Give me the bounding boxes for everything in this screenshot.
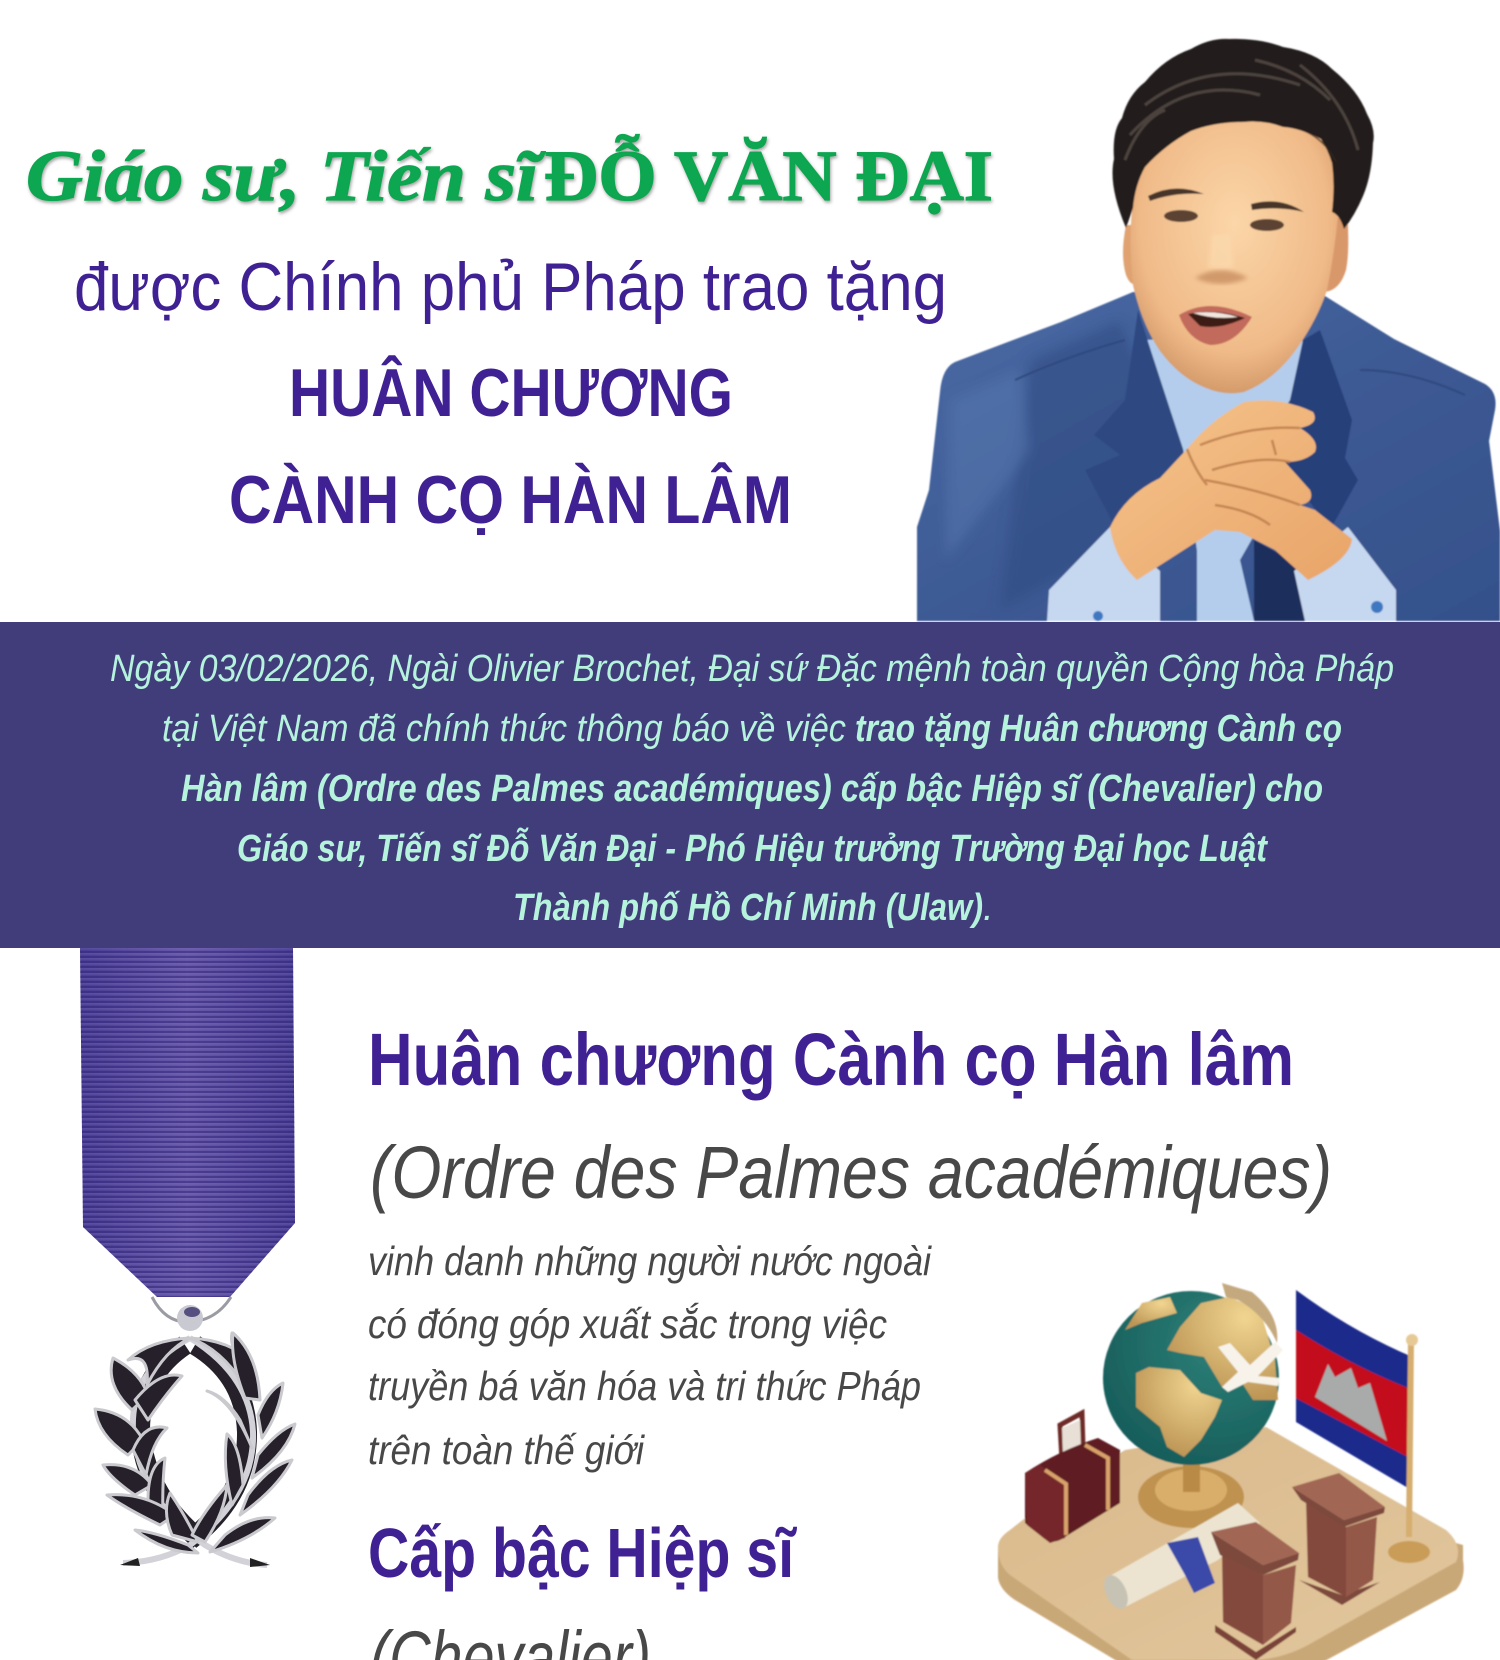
- announcement line 2: tại Việt Nam đã chính thức thông báo về việc: [162, 708, 846, 750]
- flag temple: [1315, 1364, 1387, 1441]
- announcement line 5: Thành phố Hồ Chí Minh (Ulaw): [513, 887, 983, 929]
- mouth: [1179, 306, 1252, 345]
- shirt collar: [1146, 330, 1320, 621]
- text block: description: [368, 1238, 933, 1473]
- illustration: globe, flag and podiums on wooden board: [998, 1283, 1464, 1660]
- flag: [1296, 1290, 1408, 1488]
- title: award line 1: HUÂN CHƯƠNG: [289, 354, 733, 431]
- subtitle: được Chính phủ Pháp trao tặng: [74, 249, 947, 325]
- globe: [1103, 1291, 1279, 1465]
- ribbon: [80, 948, 295, 1297]
- title: name line: ĐỖ VĂN ĐẠI: [544, 134, 993, 216]
- heading: French name: (Ordre des Palmes académiques): [370, 1131, 1332, 1214]
- tie area: [1254, 540, 1322, 621]
- airplane: [1218, 1342, 1283, 1392]
- wooden board: [998, 1480, 1464, 1660]
- jacket: [917, 292, 1500, 621]
- medal: Palmes académiques: [80, 948, 295, 1567]
- text block: description: vinh danh những người nước ngoài: [368, 1238, 933, 1284]
- ears: [1123, 225, 1140, 284]
- front podium: [1211, 1522, 1299, 1660]
- neck and face: [1130, 110, 1338, 393]
- eyebrows: [1148, 188, 1204, 201]
- announcement line 5: .: [983, 887, 994, 929]
- eyes: [1164, 210, 1198, 222]
- text block: description: có đóng góp xuất sắc trong việc: [368, 1301, 887, 1347]
- scroll: [1108, 1503, 1260, 1607]
- title block: [26, 134, 993, 538]
- nose: [1195, 270, 1248, 284]
- text block: description: truyền bá văn hóa và tri thức Pháp: [368, 1363, 921, 1409]
- suitcase: [1060, 1413, 1083, 1460]
- back podium: [1292, 1473, 1385, 1605]
- title: award line 2: CÀNH CỌ HÀN LÂM: [229, 461, 792, 538]
- announcement line 2: trao tặng Huân chương Cành cọ: [855, 708, 1342, 750]
- panel: announcement band: [0, 622, 1500, 948]
- title: name line: [26, 134, 993, 216]
- hair: [1112, 39, 1374, 229]
- flag pole: [1409, 1340, 1411, 1537]
- wreath: [95, 1333, 295, 1565]
- globe swoosh: [1222, 1283, 1277, 1343]
- announcement line 3: Hàn lâm (Ordre des Palmes académiques) cấp bậc Hiệp sĩ (Chevalier) cho: [181, 768, 1323, 810]
- globe stand: [1138, 1466, 1244, 1528]
- jacket lapels: [1085, 310, 1195, 565]
- shirt cuffs: [1047, 527, 1160, 621]
- text block: description: trên toàn thế giới: [368, 1427, 646, 1473]
- ring: [152, 1297, 231, 1322]
- announcement line 4: Giáo sư, Tiến sĩ Đỗ Văn Đại - Phó Hiệu trưởng Trường Đại học Luật: [237, 826, 1268, 870]
- heading: order name: Huân chương Cành cọ Hàn lâm: [368, 1018, 1294, 1101]
- heading: rank: Cấp bậc Hiệp sĩ: [368, 1514, 798, 1592]
- title: name line: Giáo sư, Tiến sĩ: [26, 136, 546, 216]
- announcement line 2: [162, 708, 1342, 750]
- portrait of Professor Do Van Dai: [917, 39, 1500, 621]
- clasped hands: [1110, 400, 1352, 580]
